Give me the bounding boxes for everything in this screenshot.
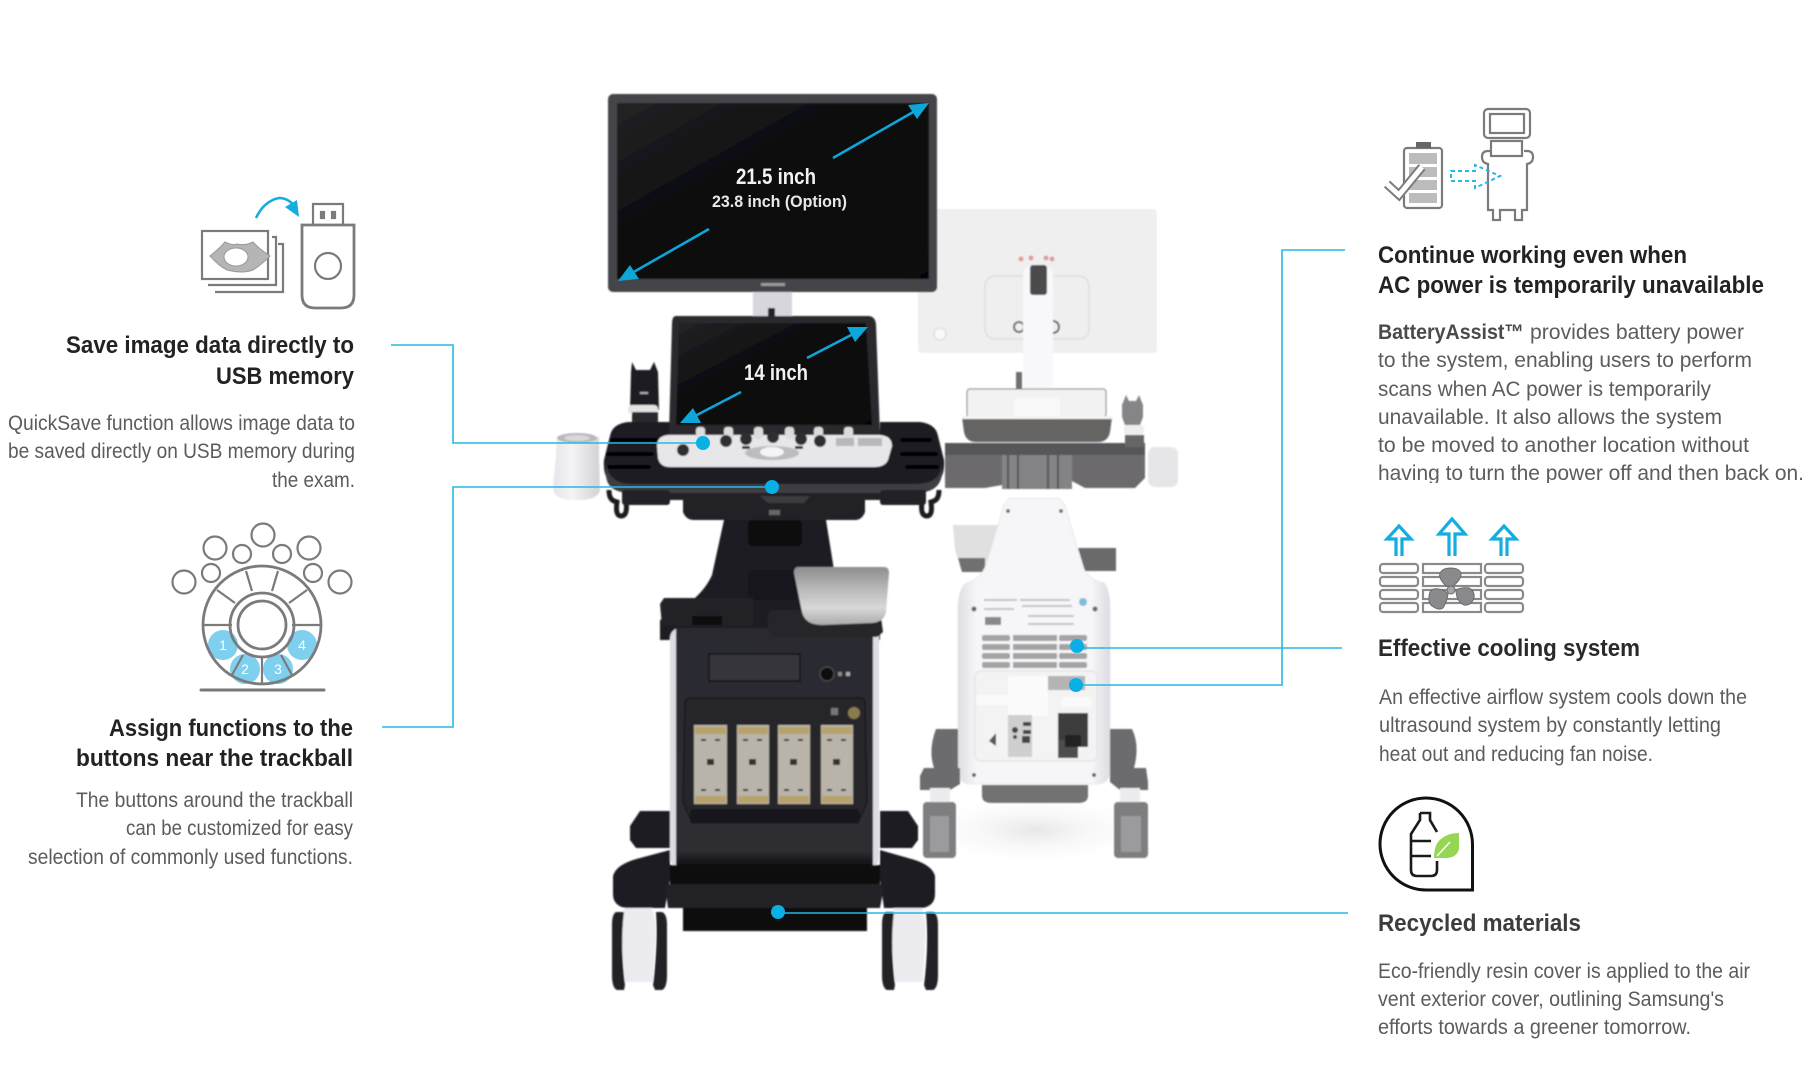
neck [660, 520, 880, 640]
icon: trackball buttons: 3 [274, 661, 282, 677]
text: BatteryAssist description: scans when AC power is temporarily [1378, 378, 1711, 401]
callout line: recycled materials [771, 905, 1348, 919]
arrows: monitor diagonal [618, 103, 929, 281]
icon: trackball buttons: 2 [241, 661, 249, 677]
panel: save image to USB [8, 198, 355, 492]
text: trackball description: selection of commonly used functions. [28, 846, 353, 869]
text: cooling description: An effective airflow system cools down the [1379, 686, 1747, 709]
icon: trackball buttons [172, 524, 352, 690]
rear ultrasound system (grey) [910, 209, 1178, 868]
bowl [794, 567, 889, 625]
text: trackball description [28, 789, 353, 869]
probe port 1 [694, 725, 727, 804]
callout line: trackball buttons [382, 480, 779, 727]
text: recycled description: efforts towards a greener tomorrow. [1378, 1016, 1691, 1039]
heading: continue working: Continue working even when [1378, 242, 1687, 269]
stand between monitor and touch screen [753, 290, 792, 320]
monitor size label: 21.5 inch [736, 164, 816, 189]
callout line: USB memory [391, 345, 710, 450]
panel: cooling system [1378, 519, 1747, 766]
text: cooling description: ultrasound system by constantly letting [1379, 714, 1721, 737]
panel: recycled materials [1378, 798, 1750, 1039]
icon: trackball buttons: 1 [219, 637, 227, 653]
icon: bottle and leaf [1380, 798, 1472, 890]
heading: recycled materials: Recycled materials [1378, 910, 1581, 937]
foot rest [666, 884, 883, 908]
arrows: touch screen diagonal [680, 327, 868, 423]
text: BatteryAssist description: to the system, enabling users to perform [1378, 349, 1752, 372]
callout line: battery [1069, 250, 1345, 692]
right shelf [768, 610, 883, 637]
text: recycled description [1378, 960, 1750, 1039]
heading: assign functions: buttons near the trackball [76, 745, 353, 772]
heading: assign functions: Assign functions to the [109, 715, 353, 742]
text: trackball description: can be customized for easy [126, 817, 353, 840]
text: cooling description [1379, 686, 1747, 766]
main monitor bezel [608, 94, 937, 292]
text: QuickSave description [8, 412, 355, 492]
text: QuickSave description: QuickSave function allows image data to [8, 412, 355, 435]
heading: continue working [1378, 242, 1764, 299]
probe port 4 [821, 725, 853, 804]
front wheels [612, 908, 938, 990]
left shelf [660, 598, 753, 626]
panel: assign trackball functions [28, 524, 353, 869]
text: recycled description: vent exterior cover, outlining Samsung's [1378, 988, 1724, 1011]
heading: save image data: USB memory [216, 363, 355, 390]
cart body [670, 628, 879, 868]
icon: image to USB [202, 198, 354, 308]
probe port 2 [737, 725, 769, 804]
tray hooks [609, 490, 939, 516]
under box [683, 908, 867, 931]
text: cooling description: heat out and reducing fan noise. [1379, 743, 1653, 766]
heading: save image data [66, 332, 355, 390]
panel: battery assist [1378, 109, 1804, 485]
heading: continue working: AC power is temporarily unavailable [1378, 272, 1764, 299]
text: BatteryAssist description: BatteryAssist™ [1378, 321, 1524, 344]
text: BatteryAssist description: having to turn the power off and then back on. [1378, 462, 1804, 485]
text: BatteryAssist description: unavailable. It also allows the system [1378, 406, 1722, 429]
monitor size label [712, 164, 847, 211]
control console [657, 427, 892, 467]
monitor size label: 23.8 inch (Option) [712, 192, 847, 211]
front ultrasound system (black) [553, 94, 944, 990]
icon: battery to system [1387, 109, 1533, 220]
icon: fan and airflow [1380, 519, 1523, 612]
text: recycled description: Eco-friendly resin cover is applied to the air [1378, 960, 1750, 983]
heading: effective cooling: Effective cooling system [1378, 635, 1640, 662]
text: QuickSave description: the exam. [272, 469, 355, 492]
heading: assign functions [76, 715, 353, 772]
white cup holder [553, 433, 600, 500]
text: BatteryAssist description: provides battery power [1530, 321, 1744, 344]
heading: save image data: Save image data directly to [66, 332, 354, 359]
text: QuickSave description: be saved directly on USB memory during [8, 440, 355, 463]
power button [820, 667, 850, 681]
callout line: cooling [1070, 639, 1342, 653]
probe holder [628, 362, 659, 424]
text: BatteryAssist description: to be moved to another location without [1378, 434, 1749, 457]
main monitor screen [617, 103, 929, 279]
touch screen size label: 14 inch [744, 360, 808, 385]
text: BatteryAssist description [1378, 321, 1804, 485]
slot [709, 654, 800, 681]
text: trackball description: The buttons around the trackball [76, 789, 353, 812]
under tray [665, 493, 885, 520]
icon: trackball buttons: 4 [298, 637, 306, 653]
tray [604, 422, 944, 493]
probe port panel [683, 698, 867, 823]
probe port 3 [778, 725, 810, 804]
base wings [613, 811, 935, 908]
touch screen [669, 316, 880, 435]
